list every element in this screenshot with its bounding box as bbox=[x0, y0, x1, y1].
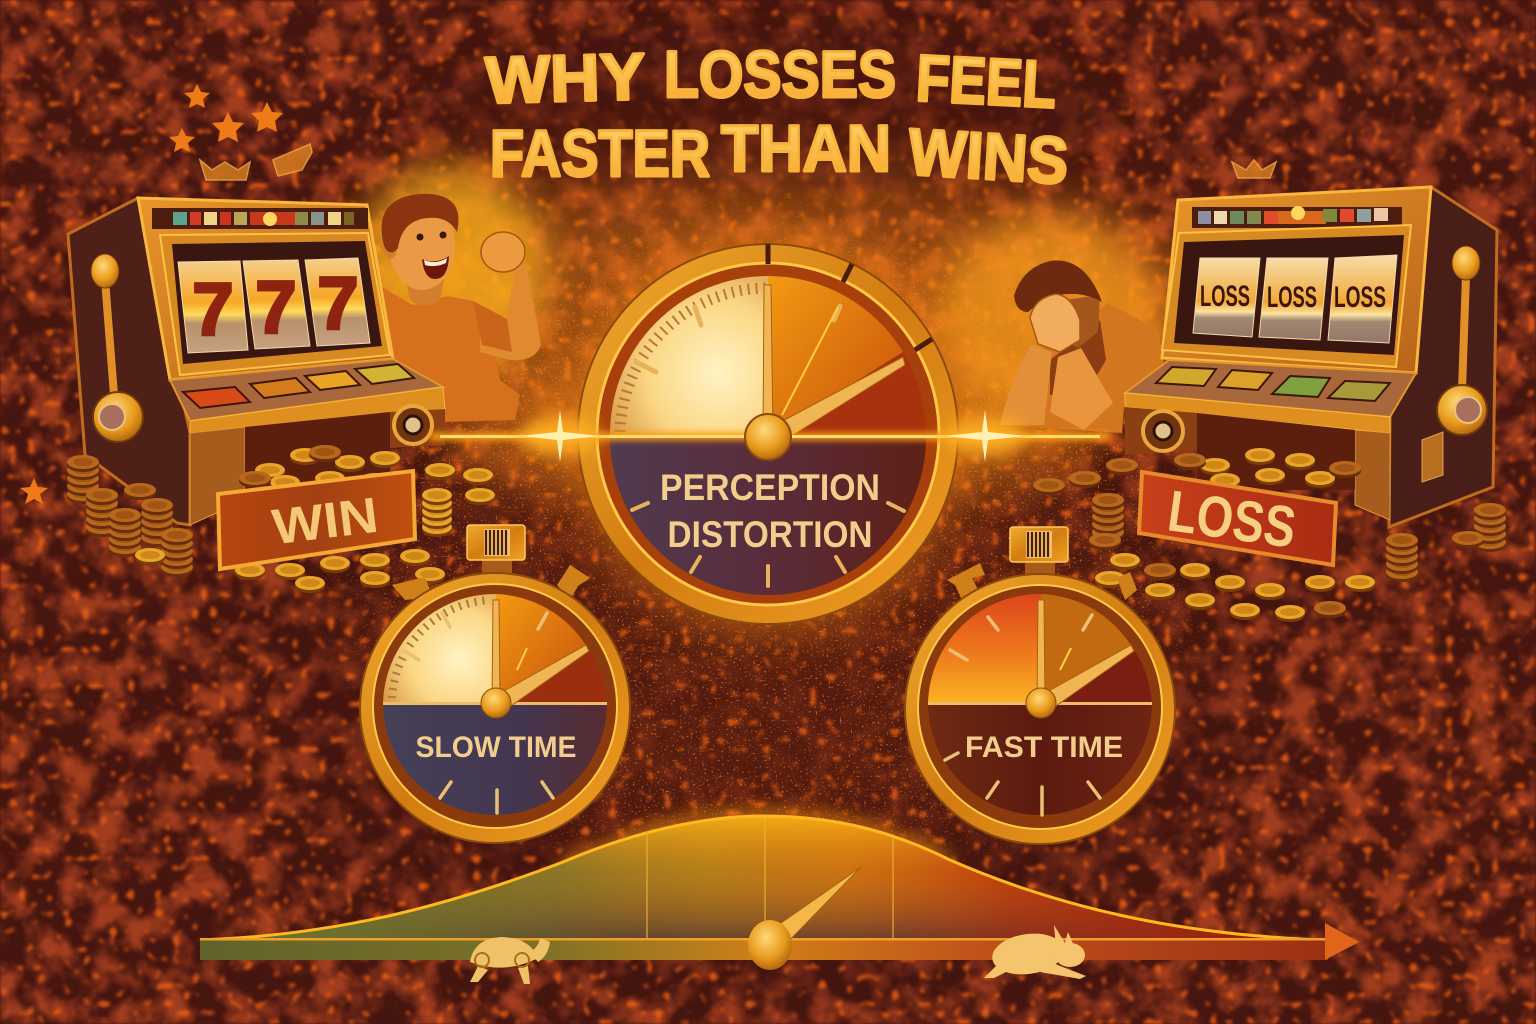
face panels bbox=[383, 594, 496, 703]
torso bbox=[1000, 303, 1165, 433]
gauge hub bbox=[745, 414, 791, 460]
dial needle bbox=[748, 867, 861, 970]
sleeve bbox=[473, 301, 512, 352]
ring segment gaps bbox=[768, 244, 932, 350]
machine side panel bbox=[68, 198, 190, 525]
lever bbox=[91, 254, 143, 442]
reel bezel bbox=[160, 233, 390, 375]
horizontal energy flash bbox=[430, 410, 1110, 462]
ticks bbox=[403, 613, 553, 813]
left pillar bbox=[190, 427, 245, 525]
raised arm bbox=[480, 262, 541, 360]
title: LOSSES bbox=[664, 37, 896, 111]
decorative crowns bbox=[200, 144, 1276, 180]
neck bbox=[405, 275, 445, 306]
stopwatch: slow time bbox=[360, 525, 630, 843]
label: FAST TIME bbox=[965, 731, 1123, 764]
stopwatch: fast time bbox=[905, 527, 1175, 844]
curve outline bbox=[200, 816, 1325, 940]
gauge ring bbox=[578, 244, 958, 624]
title: FEEL bbox=[914, 40, 1058, 122]
axis arrow bbox=[200, 923, 1359, 960]
face: orange wedge bbox=[768, 276, 903, 437]
sign: win: WIN bbox=[269, 487, 381, 555]
speaker bbox=[394, 406, 432, 444]
head bbox=[389, 202, 455, 290]
coin tray opening bbox=[1197, 413, 1355, 490]
speaker bbox=[1143, 411, 1183, 451]
sign: loss: LOSS bbox=[1164, 478, 1300, 561]
reel bezel bbox=[1162, 225, 1411, 367]
person celebrating bbox=[355, 165, 545, 422]
coins: left pile bbox=[67, 445, 495, 593]
reels 777: 7 bbox=[255, 266, 297, 349]
curve shading bbox=[386, 818, 1160, 938]
top light strip bbox=[1192, 206, 1402, 228]
face: slow half bbox=[610, 276, 768, 437]
gauge label bbox=[660, 467, 880, 555]
needles bbox=[1037, 600, 1045, 703]
reels 777 bbox=[178, 258, 370, 353]
face: red wedge bbox=[768, 352, 926, 437]
sleeve bbox=[1050, 348, 1113, 430]
sign: win bbox=[218, 471, 415, 569]
crown bbox=[1010, 527, 1068, 578]
bell curve timeline bbox=[200, 816, 1359, 984]
speaker housing bbox=[390, 409, 445, 448]
side buttons bbox=[392, 565, 590, 600]
case bbox=[360, 573, 630, 843]
slot machine: win bbox=[68, 198, 445, 525]
hands bbox=[1030, 294, 1080, 352]
slot machine: loss bbox=[1125, 187, 1497, 527]
needles bbox=[492, 600, 500, 703]
side buttons bbox=[947, 563, 1137, 600]
crown bbox=[467, 525, 525, 578]
deck bbox=[1125, 360, 1416, 417]
gauge needles bbox=[763, 285, 905, 442]
buttons bbox=[183, 364, 414, 408]
title: WHY bbox=[484, 39, 646, 117]
machine side panel bbox=[1389, 187, 1497, 527]
title: FASTER bbox=[490, 116, 710, 190]
neck and ear bbox=[1062, 295, 1100, 348]
background stars bbox=[20, 84, 283, 504]
right pillar bbox=[1355, 430, 1390, 520]
hair bbox=[1014, 261, 1102, 312]
mouth bbox=[422, 256, 449, 279]
major ticks bbox=[636, 306, 840, 372]
fist bbox=[481, 232, 525, 272]
title: THAN bbox=[721, 111, 891, 185]
minor tick band bbox=[620, 288, 766, 432]
person in despair bbox=[935, 215, 1165, 433]
reels 777: 7 bbox=[192, 268, 234, 351]
coin tray opening bbox=[245, 412, 390, 500]
gauge label: PERCEPTION bbox=[660, 467, 880, 508]
icon: turtle bbox=[470, 937, 550, 984]
face panels bbox=[928, 594, 1041, 703]
reels LOSS bbox=[1193, 255, 1397, 343]
title bbox=[484, 37, 1071, 198]
speaker housing bbox=[1125, 407, 1197, 455]
front lip bbox=[1125, 393, 1390, 433]
icon: rabbit bbox=[984, 925, 1086, 979]
central gauge: perception distortion bbox=[430, 229, 1110, 639]
machine top frame bbox=[1162, 187, 1431, 373]
reels LOSS: LOSS bbox=[1200, 280, 1250, 313]
reel window bbox=[172, 241, 382, 364]
case bbox=[905, 574, 1175, 844]
lever bbox=[1437, 246, 1487, 435]
curve glow bbox=[560, 816, 950, 870]
shadow chest bbox=[1050, 320, 1106, 395]
buttons bbox=[1156, 367, 1390, 401]
coin slot bbox=[1422, 432, 1443, 482]
gauge label: DISTORTION bbox=[668, 514, 872, 555]
deck bbox=[170, 359, 443, 421]
front lip bbox=[190, 387, 445, 433]
gauge glow bbox=[563, 229, 973, 639]
torso bbox=[382, 287, 520, 422]
face: lower half bbox=[610, 437, 926, 595]
curve area bbox=[200, 816, 1325, 940]
title: WINS bbox=[906, 114, 1071, 198]
reel window bbox=[1174, 235, 1404, 355]
coins: right pile bbox=[1033, 448, 1506, 622]
reels LOSS: LOSS bbox=[1267, 281, 1317, 314]
hair bbox=[382, 194, 458, 253]
machine top frame bbox=[138, 198, 393, 380]
label: SLOW TIME bbox=[416, 731, 576, 764]
reels 777: 7 bbox=[317, 262, 359, 345]
top light strip bbox=[152, 208, 368, 229]
forearm left bbox=[1000, 345, 1052, 425]
reels LOSS: LOSS bbox=[1334, 281, 1386, 314]
ticks bbox=[945, 615, 1100, 815]
